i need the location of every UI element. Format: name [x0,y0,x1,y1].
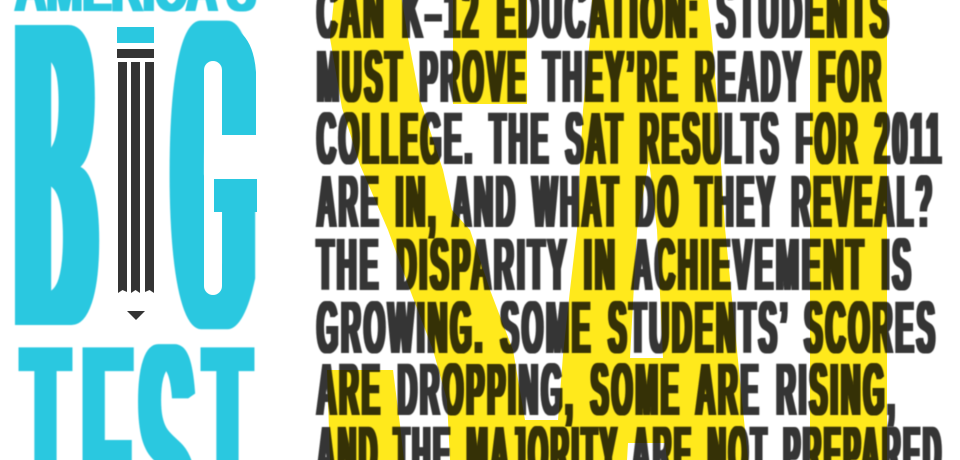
letter S: upper arm and diagonal [330,0,748,460]
pencil forming the letter I [117,27,154,320]
ferrule band [117,49,154,58]
letter G: inner counter [204,61,222,295]
letter T: stem [810,0,887,460]
letter G: square terminal gap [222,135,260,179]
letter S: lower terminal [327,370,404,460]
letter A: counter [630,160,663,358]
pencil stripes [118,62,154,293]
yellow SAT backdrop [327,0,887,460]
letter G: spur [214,179,257,212]
body paragraph [317,0,944,460]
letter S: top terminal [453,0,527,104]
pencil tip [127,311,145,320]
letter G: upper right column [222,32,256,135]
eraser [117,27,154,43]
